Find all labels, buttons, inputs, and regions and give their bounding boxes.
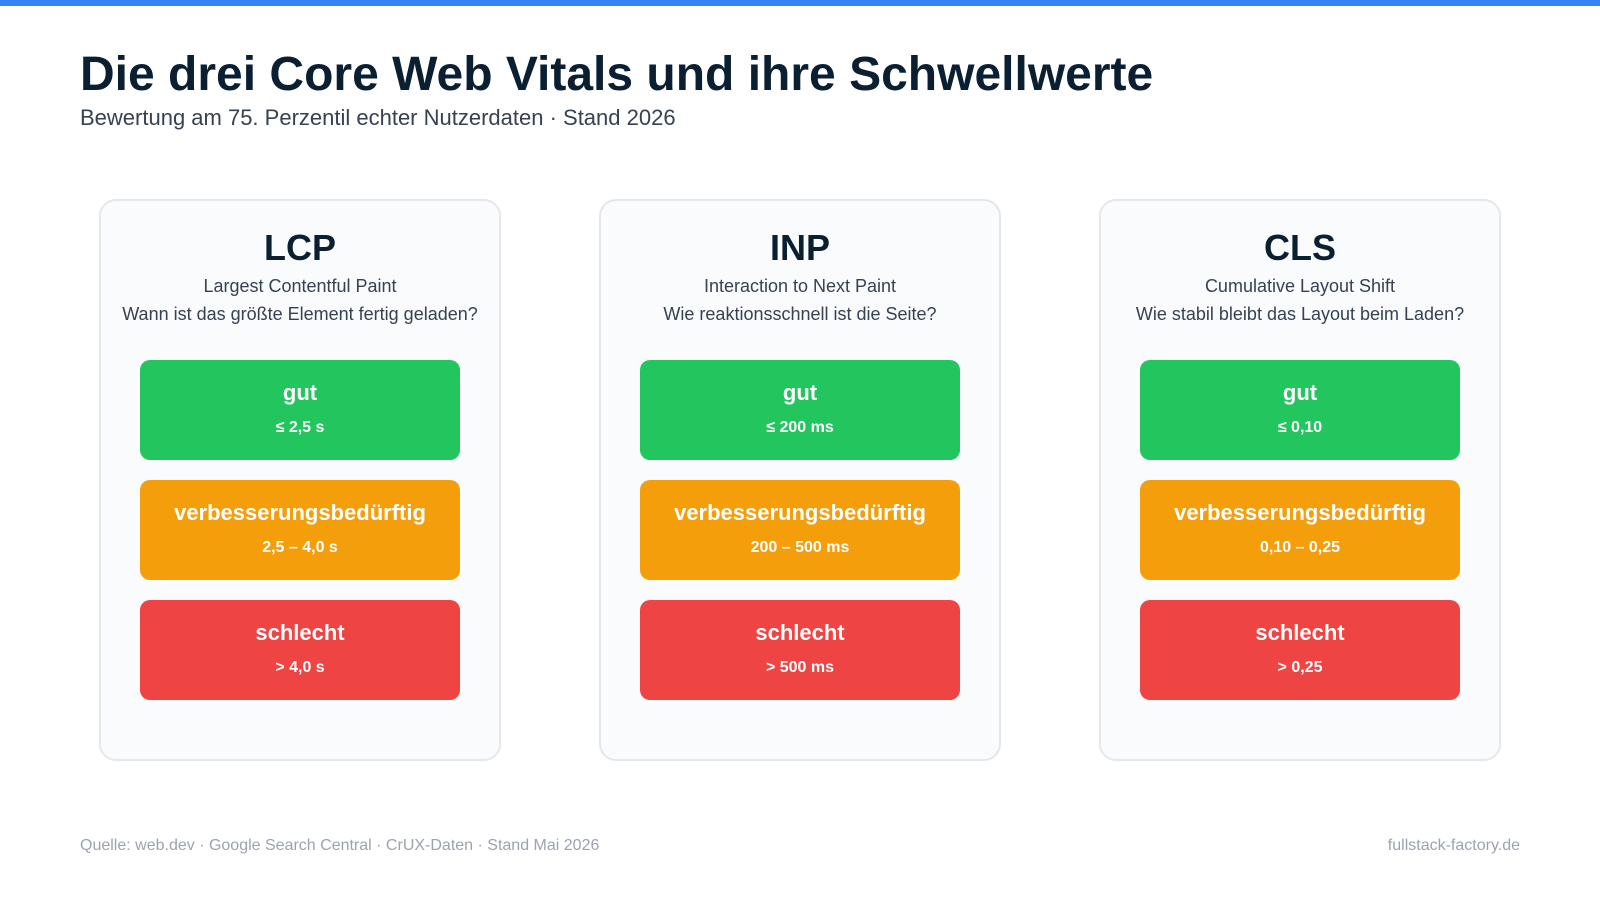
CLS threshold: gut [1140,360,1460,460]
footer: site name: fullstack-factory.de [1388,837,1520,854]
LCP heading: LCP [264,227,336,268]
INP threshold: schlecht: > 500 ms [766,659,834,676]
panel: CLS [1100,200,1500,760]
CLS threshold: schlecht [1140,600,1460,700]
CLS description: Wie stabil bleibt das Layout beim Laden? [1136,304,1464,324]
CLS threshold: gut: ≤ 0,10 [1278,419,1322,436]
LCP description: Largest Contentful Paint [203,276,397,296]
LCP description [122,276,478,324]
LCP threshold: verbesserungsbedürftig: verbesserungsbedürftig [174,500,426,525]
top accent bar [0,0,1600,6]
LCP threshold: verbesserungsbedürftig: 2,5 – 4,0 s [262,539,338,556]
LCP threshold: verbesserungsbedürftig [140,480,460,580]
INP threshold: gut: gut [783,380,818,405]
INP threshold: gut [640,360,960,460]
LCP threshold: gut: gut [283,380,318,405]
panel: INP [600,200,1000,760]
footer: source: Quelle: web.dev · Google Search Central · CrUX-Daten · Stand Mai 2026 [80,837,599,854]
INP description [663,276,937,324]
CLS description [1136,276,1464,324]
title: Die drei Core Web Vitals und ihre Schwellwerte [80,48,1153,101]
subtitle: Bewertung am 75. Perzentil echter Nutzerdaten · Stand 2026 [80,105,676,130]
INP heading: INP [770,227,830,268]
LCP threshold: schlecht: schlecht [255,620,345,645]
LCP threshold: gut: ≤ 2,5 s [276,419,325,436]
INP threshold: schlecht: schlecht [755,620,845,645]
CLS threshold: verbesserungsbedürftig: 0,10 – 0,25 [1260,539,1340,556]
INP threshold: verbesserungsbedürftig: verbesserungsbedürftig [674,500,926,525]
INP threshold: schlecht [640,600,960,700]
CLS threshold: verbesserungsbedürftig [1140,480,1460,580]
LCP threshold: schlecht: > 4,0 s [275,659,325,676]
LCP description: Wann ist das größte Element fertig geladen? [122,304,478,324]
INP threshold: gut: ≤ 200 ms [766,419,834,436]
LCP threshold: gut [140,360,460,460]
LCP threshold: schlecht [140,600,460,700]
CLS threshold: schlecht: schlecht [1255,620,1345,645]
panel: LCP [100,200,500,760]
INP threshold: verbesserungsbedürftig: 200 – 500 ms [751,539,849,556]
CLS threshold: schlecht: > 0,25 [1278,659,1323,676]
INP description: Interaction to Next Paint [704,276,896,296]
INP threshold: verbesserungsbedürftig [640,480,960,580]
INP description: Wie reaktionsschnell ist die Seite? [663,304,937,324]
CLS heading: CLS [1264,227,1336,268]
CLS threshold: verbesserungsbedürftig: verbesserungsbedürftig [1174,500,1426,525]
CLS description: Cumulative Layout Shift [1205,276,1395,296]
CLS threshold: gut: gut [1283,380,1318,405]
